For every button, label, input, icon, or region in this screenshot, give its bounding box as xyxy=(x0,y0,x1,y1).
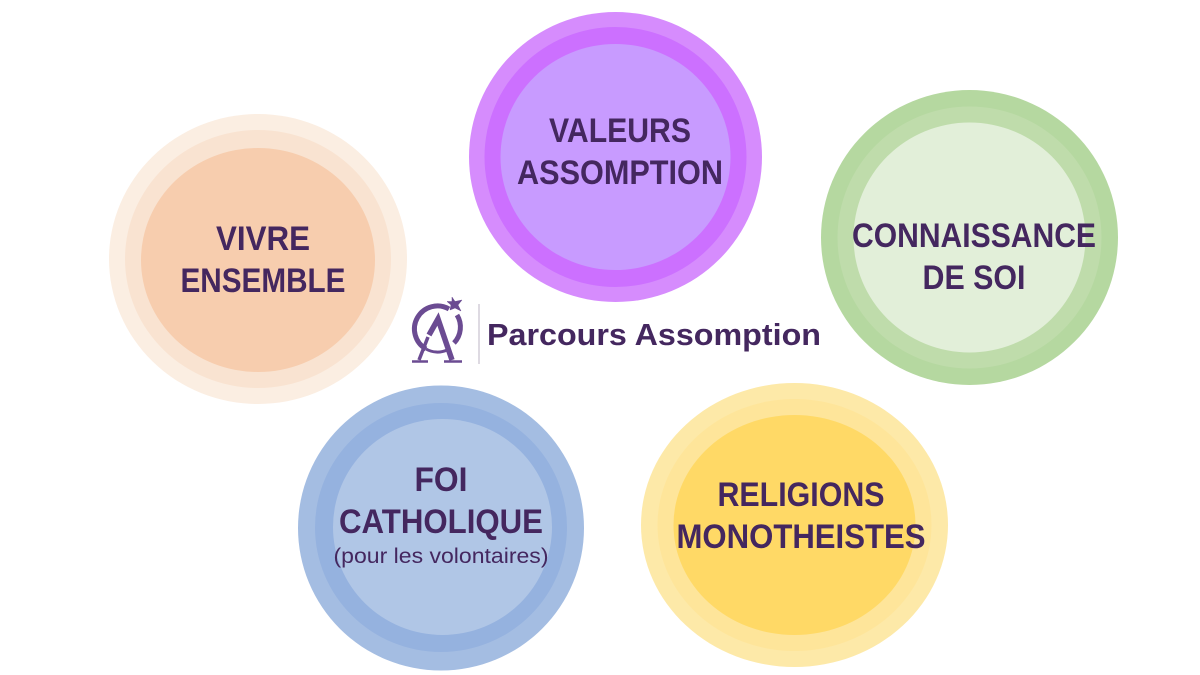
panel: Foi catholique xyxy=(298,386,584,670)
panel: Religions monotheistes xyxy=(641,383,948,667)
label: Foi catholique: CATHOLIQUE xyxy=(339,503,543,541)
label: Religions monotheistes xyxy=(676,476,926,556)
label: Vivre ensemble: ENSEMBLE xyxy=(180,262,346,300)
panel: Valeurs Assomption xyxy=(469,12,762,302)
label: Connaissance de soi xyxy=(852,217,1096,297)
icon: Assomption emblem xyxy=(412,297,462,362)
label: Foi catholique: (pour les volontaires) xyxy=(334,545,548,568)
label: Foi catholique: FOI xyxy=(414,461,468,499)
label: Connaissance de soi: DE SOI xyxy=(922,259,1026,297)
logo: Parcours Assomption xyxy=(412,297,821,364)
label: Valeurs Assomption: VALEURS xyxy=(549,112,691,150)
panel: Connaissance de soi xyxy=(821,90,1118,385)
label: Religions monotheistes: MONOTHEISTES xyxy=(676,518,926,556)
label: Valeurs Assomption xyxy=(517,112,723,192)
label: Connaissance de soi: CONNAISSANCE xyxy=(852,217,1096,255)
panel: Vivre ensemble xyxy=(109,114,407,404)
brand name: Parcours Assomption xyxy=(487,317,821,352)
label: Vivre ensemble xyxy=(180,220,346,300)
label: Vivre ensemble: VIVRE xyxy=(216,220,310,258)
label: Valeurs Assomption: ASSOMPTION xyxy=(517,154,723,192)
divider xyxy=(478,304,480,364)
label: Foi catholique xyxy=(334,461,548,568)
label: Religions monotheistes: RELIGIONS xyxy=(718,476,884,514)
